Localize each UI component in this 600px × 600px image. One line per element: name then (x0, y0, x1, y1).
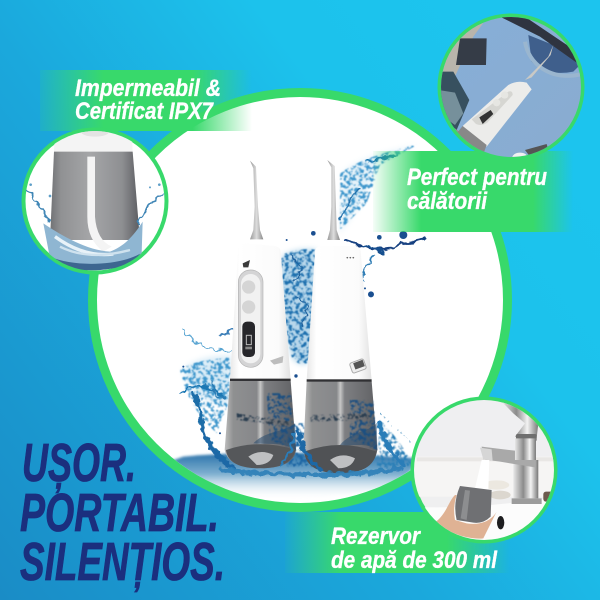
label text: travel: Perfect pentru (407, 164, 547, 191)
title: light, portable, silent: SILENȚIOS. (20, 532, 225, 592)
water splash: mottled masses (180, 143, 420, 470)
label band: waterproof (40, 70, 252, 131)
label band: reservoir (285, 512, 510, 574)
water splash: front crown (203, 413, 410, 475)
label text: reservoir: Rezervor (331, 523, 421, 550)
product photo: two water flossers with splash (150, 143, 425, 500)
water pool (173, 450, 412, 494)
inset circle: waterproof tank (24, 127, 166, 272)
flosser: right device (303, 160, 377, 473)
title: light, portable, silent (20, 433, 225, 592)
water specks on tanks (237, 393, 377, 450)
flosser: left device (225, 161, 296, 468)
inset circle: travel photo (438, 14, 584, 157)
main circle (92, 92, 508, 508)
inset circle: faucet photo (410, 397, 560, 547)
title: light, portable, silent: UȘOR. (22, 433, 136, 493)
label text: travel: călătorii (407, 188, 488, 215)
label text: waterproof: Impermeabil & (75, 75, 221, 102)
label band: travel (373, 151, 573, 232)
water splash: strokes (180, 155, 425, 460)
label text: waterproof: Certificat IPX7 (75, 98, 214, 125)
title: light, portable, silent: PORTABIL. (20, 483, 219, 543)
label text: reservoir: de apă de 300 ml (331, 547, 498, 574)
water splash: light haze (183, 145, 417, 407)
